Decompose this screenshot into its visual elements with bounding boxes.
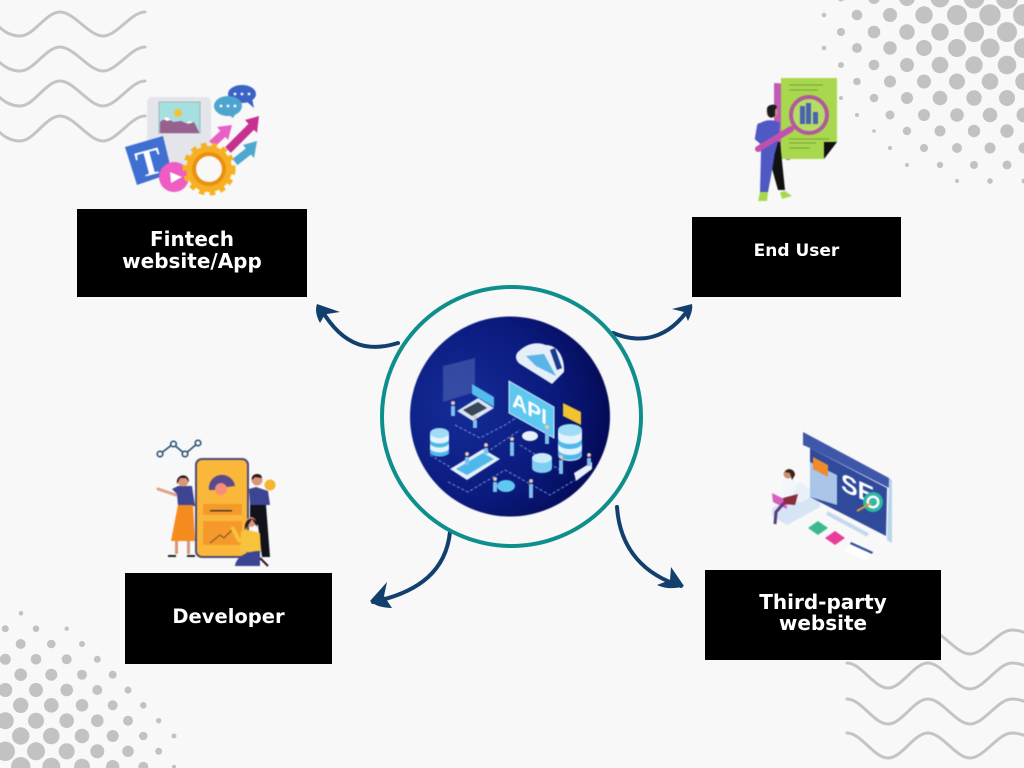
label box: End User: End User — [754, 241, 839, 261]
halftone dots: top right — [822, 0, 1024, 184]
label box: Developer: Developer — [172, 605, 285, 628]
label box: End User — [692, 217, 901, 297]
icon: fintech app illustration — [125, 85, 259, 193]
label box: Third-party website: website — [779, 611, 867, 635]
center API illustration: API — [512, 387, 547, 430]
icon: third-party website SEO screen: SE — [841, 467, 874, 511]
icon: third-party website SEO screen — [772, 432, 892, 561]
label box: Third-party website: Third-party — [759, 590, 887, 614]
label box: Developer — [125, 573, 332, 664]
icon: end user with report — [758, 78, 837, 201]
icon: developer team with phone — [157, 440, 276, 566]
waves: top left — [0, 12, 145, 141]
curved arrow: to fintech — [316, 304, 398, 347]
label box: Third-party website — [705, 570, 941, 660]
center teal ring — [382, 287, 641, 546]
icon: fintech app illustration: T — [132, 139, 167, 187]
curved arrow: to developer — [370, 532, 450, 608]
label box: Fintech website/App — [77, 209, 307, 297]
curved arrow: to end user — [613, 304, 692, 338]
waves: bottom right — [847, 630, 1024, 758]
label box: Fintech website/App: website/App — [122, 249, 262, 273]
curved arrow: to third-party website — [617, 507, 684, 588]
halftone dots: bottom left — [0, 611, 176, 768]
center API illustration — [410, 316, 610, 516]
label box: Fintech website/App: Fintech — [150, 227, 234, 251]
